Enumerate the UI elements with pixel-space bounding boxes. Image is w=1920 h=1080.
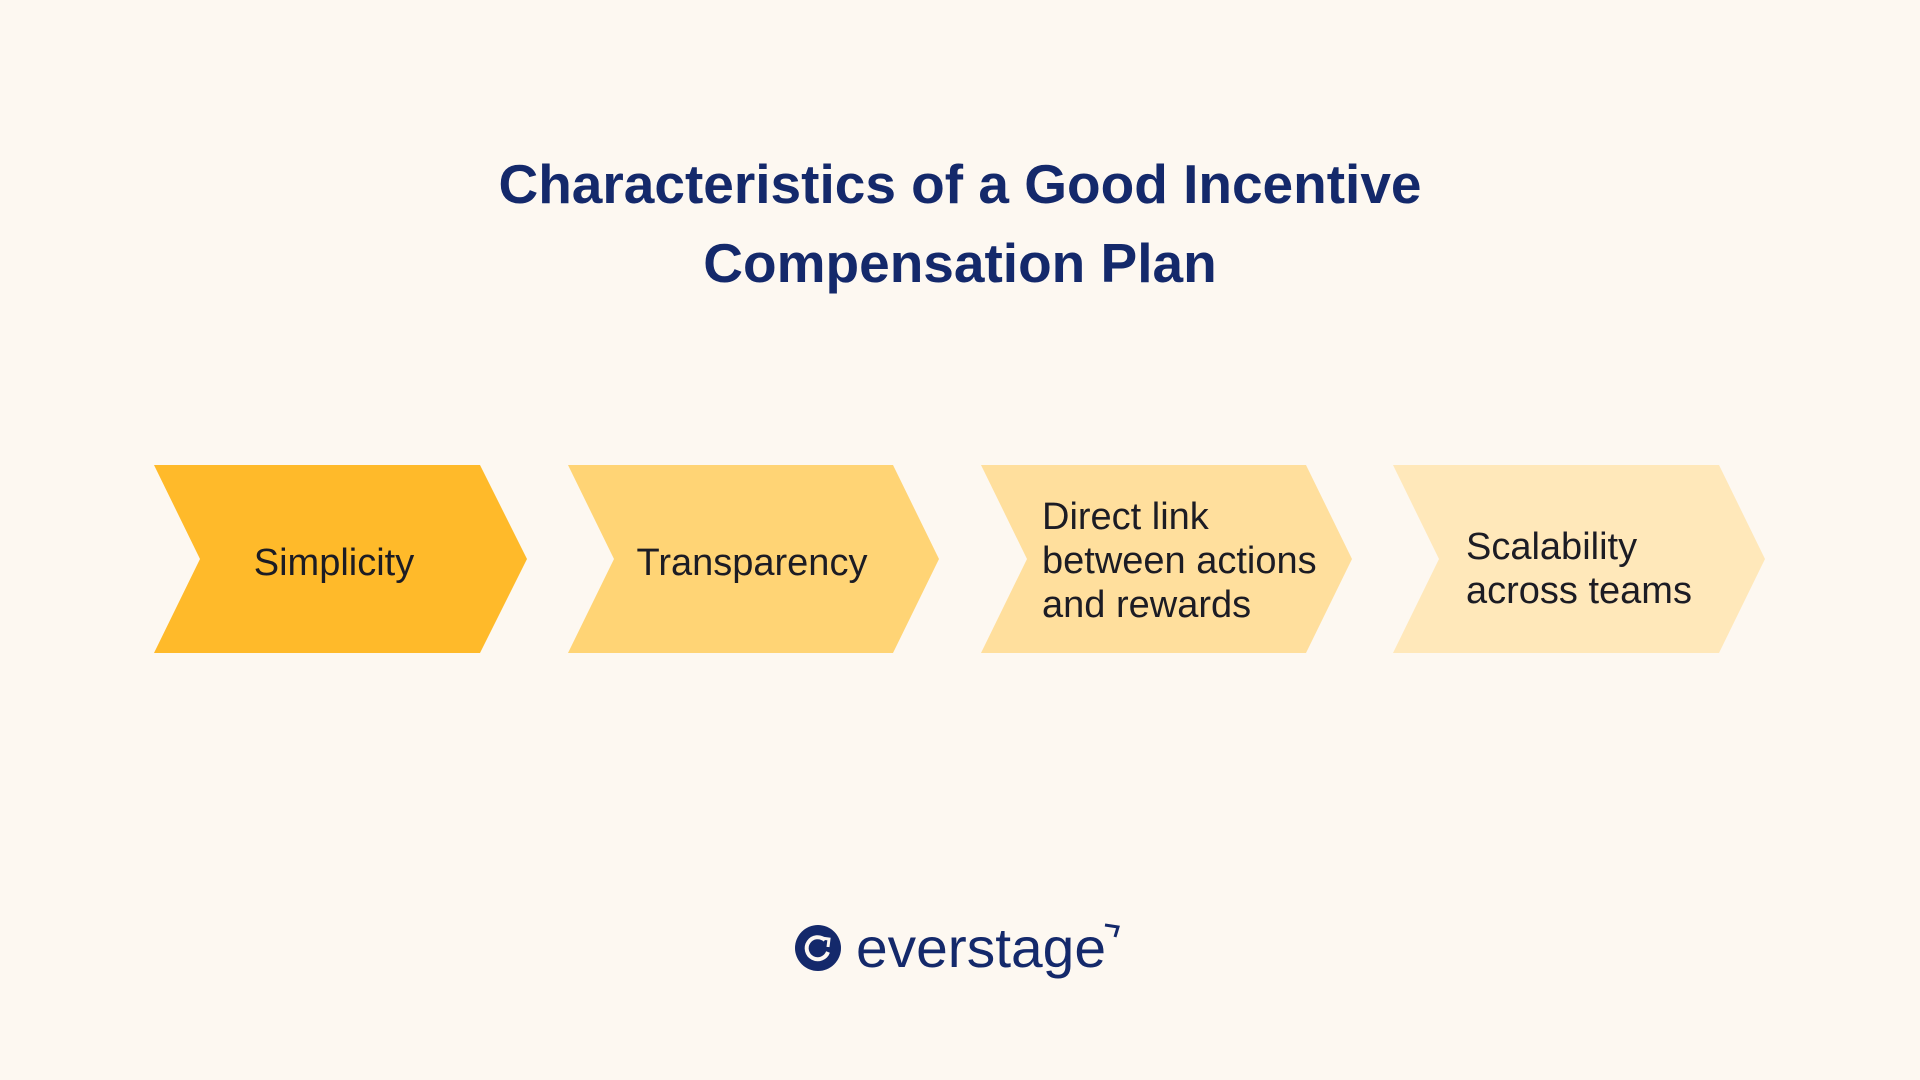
label: transparency: Transparency	[637, 542, 867, 584]
title: Characteristics of a Good Incentive	[498, 153, 1422, 215]
label: direct link: Direct link	[1042, 496, 1209, 538]
label: direct link	[1042, 496, 1317, 626]
title: Compensation Plan	[703, 232, 1217, 294]
label: direct link: between actions	[1042, 540, 1317, 582]
chevron: simplicity	[154, 465, 527, 653]
title	[498, 153, 1422, 294]
chevron: scalability	[1393, 465, 1765, 653]
logo: everstage	[795, 916, 1120, 979]
chevron: direct link	[981, 465, 1352, 653]
label: simplicity: Simplicity	[254, 542, 414, 584]
label: direct link: and rewards	[1042, 584, 1251, 626]
chevron: transparency	[568, 465, 939, 653]
label: scalability: across teams	[1466, 570, 1692, 612]
logo text: everstage	[856, 916, 1106, 979]
label: scalability	[1466, 526, 1692, 612]
label: scalability: Scalability	[1466, 526, 1637, 568]
icon: logo circle	[795, 925, 841, 971]
